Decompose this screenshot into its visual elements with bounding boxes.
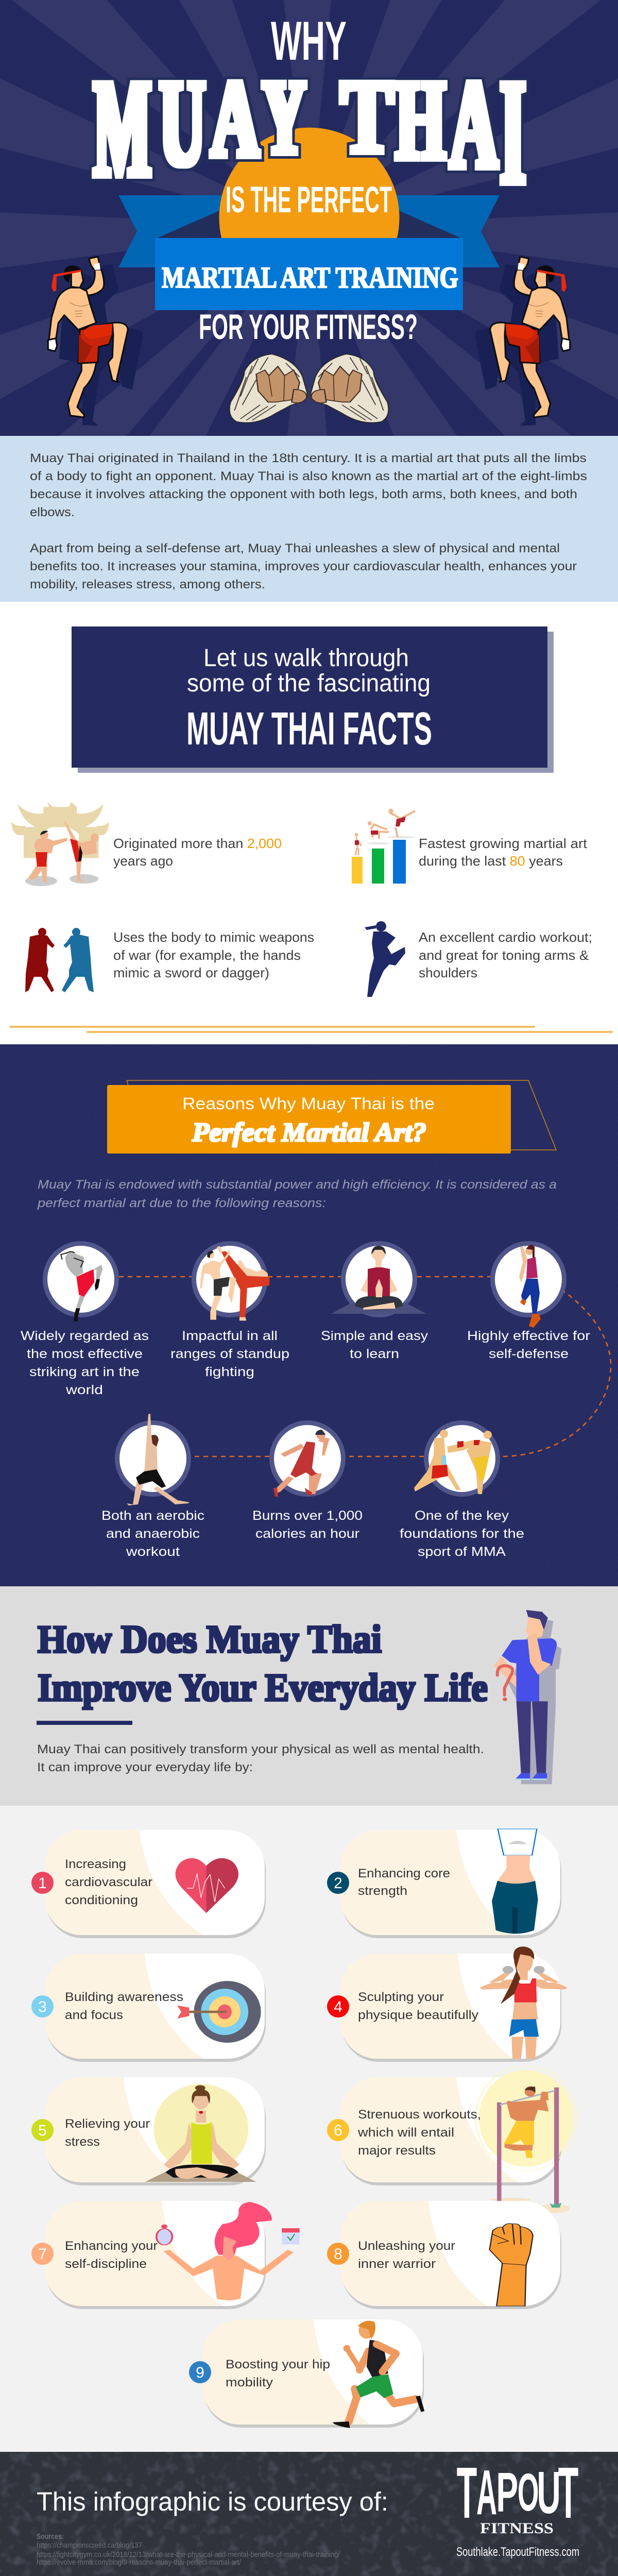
courtesy line: This infographic is courtesy of: [37, 2487, 388, 2516]
fact 2 text: Fastest growing martial art [419, 836, 588, 851]
reason 2 [170, 1241, 289, 1379]
reason 1 [21, 1241, 149, 1397]
card 2 text: strength [358, 1884, 407, 1898]
website: Southlake.TapoutFitness.com [456, 2545, 579, 2559]
card 6 text: major results [358, 2144, 436, 2158]
fact 1 text: Originated more than 2,000 [113, 836, 282, 851]
panel: facts [0, 602, 618, 1044]
badge 8: 8 [334, 2246, 342, 2263]
sources [37, 2532, 340, 2567]
sources: Sources: [37, 2532, 64, 2541]
intro paragraph 2: Apart from being a self-defense art, Muay Thai unleashes a slew of physical and mental [30, 541, 560, 555]
reason 2 text [170, 1329, 289, 1379]
card 5 text: stress [65, 2135, 100, 2149]
badge 4 [327, 1995, 349, 2018]
icon: growth bars with fighters [352, 809, 415, 884]
heading: how does muay thai improve your everyday life: Improve Your Everyday Life [38, 1666, 488, 1709]
icon: circle with stretching man [115, 1414, 191, 1505]
sunburst rays [0, 0, 618, 436]
panel: header [0, 0, 618, 436]
facts heading box [72, 626, 554, 773]
card 6 [327, 2077, 561, 2185]
fact 4 text: An excellent cardio workout; [419, 929, 592, 945]
card 8 [327, 2201, 561, 2309]
facts heading box: MUAY THAI FACTS [186, 703, 432, 755]
facts heading box: some of the fascinating [187, 670, 431, 697]
fact 4: and great for toning arms & [419, 947, 589, 963]
reason 2 text: Impactful in all [182, 1329, 278, 1343]
title: muay thai: U [160, 55, 205, 192]
icon: circle with meditating man [331, 1241, 426, 1317]
reason 5 text: workout [126, 1545, 180, 1559]
icon: circle with kicking fighter [43, 1241, 119, 1321]
fact 2 [352, 809, 588, 884]
card 5 text [65, 2117, 150, 2149]
card 9 text: Boosting your hip [226, 2358, 330, 2371]
badge 7 [31, 2243, 54, 2265]
card 4 text: physique beautifully [358, 2008, 478, 2022]
ribbon front [155, 238, 463, 310]
card 1 [31, 1830, 266, 1938]
badge 8 [327, 2243, 349, 2265]
icon: toned core [492, 1829, 538, 1934]
title: muay thai: H [396, 57, 445, 184]
card 1 text: cardiovascular [65, 1875, 152, 1889]
logo: tapout fitness: T [558, 2453, 578, 2534]
intro paragraph 2: mobility, releases stress, among others. [30, 578, 265, 591]
intro paragraph 1: because it involves attacking the opponent with both legs, both arms, both knees, and both [30, 487, 577, 501]
icon: red and blue fighters [25, 928, 94, 992]
reason 4 text [467, 1329, 590, 1361]
card 1 text: conditioning [65, 1893, 138, 1907]
card 7 [31, 2201, 300, 2309]
panel: everyday life benefits [0, 1806, 618, 2452]
card 4 text: Sculpting your [358, 1990, 444, 2004]
heading: how does muay thai improve your everyday life [38, 1618, 488, 1709]
icon: target with arrow [177, 1981, 261, 2043]
reason 1 text [21, 1329, 149, 1397]
panel: footer [0, 2452, 618, 2576]
dashed connector [119, 1277, 611, 1456]
reasons heading banner [107, 1080, 556, 1154]
reason 6 [252, 1420, 363, 1541]
icon: heart with pulse [176, 1858, 238, 1913]
card 4 text [358, 1990, 478, 2022]
card 3 [31, 1954, 266, 2062]
card 9 text: mobility [226, 2376, 273, 2389]
title: for your fitness: FOR YOUR FITNESS? [199, 307, 418, 347]
intro paragraph 1: Muay Thai originated in Thailand in the 18th century. It is a martial art that puts all the limbs [30, 451, 587, 465]
logo: tapout fitness: FITNESS [480, 2520, 554, 2537]
icon: circle with runner [269, 1420, 346, 1497]
title: muay thai: Y [263, 58, 306, 177]
card 2 text [358, 1867, 450, 1898]
icon: raised fist [490, 2224, 533, 2306]
card 3 text: and focus [65, 2008, 123, 2022]
reason 5 text [101, 1509, 204, 1559]
logo: tapout fitness [457, 2453, 578, 2537]
icon: temple with fighters [11, 802, 109, 886]
title: muay thai: I [501, 48, 526, 216]
card 8 text: Unleashing your [358, 2239, 455, 2253]
card 3 text: Building awareness [65, 1990, 183, 2004]
badge 6 [327, 2119, 349, 2141]
card 6 text: which will entail [357, 2126, 454, 2140]
reason 3 text: Simple and easy [321, 1329, 428, 1343]
card 7 text: Enhancing your [65, 2239, 158, 2253]
icon: left fighter [48, 257, 143, 426]
facts heading box: Let us walk through [203, 645, 409, 672]
fact 3 text: Uses the body to mimic weapons [113, 929, 314, 945]
badge 7: 7 [38, 2246, 47, 2263]
reason 5 text: Both an aerobic [101, 1509, 204, 1523]
fact 3: of war (for example, the hands [113, 947, 301, 963]
heading: how does muay thai improve your everyday life: How Does Muay Thai [38, 1618, 382, 1661]
reason 6 text [252, 1509, 363, 1541]
card 4 [327, 1946, 568, 2062]
reason 1 text: striking art in the [29, 1365, 140, 1379]
logo: tapout fitness: P [496, 2461, 518, 2523]
ribbon back [118, 195, 500, 267]
reason 3 text: to learn [350, 1347, 399, 1361]
reason 5 text: and anaerobic [106, 1527, 200, 1541]
title: why: WHY [271, 10, 347, 72]
title: muay thai [94, 48, 526, 216]
icon: woman with dumbbells [479, 1946, 568, 2059]
card 8 text: inner warrior [358, 2257, 436, 2271]
card 9 text [226, 2358, 330, 2389]
logo: tapout fitness: A [476, 2457, 497, 2528]
fact 3 [25, 928, 314, 992]
reasons intro text [37, 1178, 557, 1210]
badge 2: 2 [334, 1875, 342, 1892]
icon: thinking man [494, 1610, 562, 1784]
card 2 [327, 1829, 561, 1938]
sources: https://fightcitygym.co.uk/2018/12/13/what-are-the-physical-and-mental-benefits-of-muay-thai-training/ [37, 2550, 340, 2559]
card 7 text [65, 2239, 158, 2271]
intro paragraph 1: elbows. [30, 505, 75, 519]
badge 1: 1 [38, 1875, 47, 1892]
badge 6: 6 [334, 2122, 342, 2139]
logo: tapout fitness: O [518, 2463, 539, 2522]
card 5 [31, 2077, 266, 2185]
sources: https://evolve-mma.com/blog/9-reasons-muay-thai-perfect-martial-art/ [37, 2558, 242, 2567]
logo: tapout fitness: U [537, 2459, 561, 2526]
fact 3: mimic a sword or dagger) [113, 965, 269, 980]
card 3 text [65, 1990, 183, 2022]
card 7 text: self-discipline [65, 2257, 147, 2271]
badge 9 [189, 2361, 211, 2383]
icon: kicking fighter silhouette [365, 921, 405, 997]
intro text [37, 1742, 484, 1774]
intro paragraph 1 [30, 451, 587, 519]
panel: reasons [0, 1044, 618, 1586]
icon: circle with two MMA fighters [414, 1420, 500, 1497]
reason 1 text: the most effective [27, 1347, 143, 1361]
reason 5 [101, 1414, 204, 1559]
card 6 text [357, 2108, 481, 2158]
icon: circle with woman [490, 1241, 566, 1328]
reason 3 text [321, 1329, 428, 1361]
title: muay thai: A [450, 53, 497, 195]
reason 1 text: Widely regarded as [21, 1329, 149, 1343]
card 2 text: Enhancing core [358, 1867, 450, 1880]
fact 4 [365, 921, 592, 997]
fact 2: during the last 80 years [419, 853, 563, 869]
icon: runner [333, 2321, 424, 2428]
reason 7 text: One of the key [415, 1509, 509, 1523]
badge 3 [31, 1995, 54, 2018]
card 9 [189, 2319, 424, 2428]
icon: woman balancing clock and calendar [157, 2202, 300, 2300]
reasons heading banner: Reasons Why Muay Thai is the [182, 1094, 435, 1113]
fact 1 [11, 802, 282, 886]
reason 7 text: foundations for the [400, 1527, 524, 1541]
reason 7 [400, 1420, 524, 1559]
icon: meditating woman [145, 2084, 256, 2182]
badge 4: 4 [334, 1998, 342, 2015]
card 8 text [358, 2239, 455, 2271]
panel: introduction [0, 436, 618, 602]
icon: right glove [311, 354, 388, 422]
sources: https://championscreed.ca/blog/137 [37, 2541, 142, 2550]
intro paragraph 2: benefits too. It increases your stamina, improves your cardiovascular health, enhances your [30, 560, 577, 573]
reason 2 text: fighting [205, 1365, 254, 1379]
reason 3 [321, 1241, 428, 1361]
fact 4: shoulders [419, 965, 477, 980]
icon: right fighter [475, 257, 570, 426]
badge 1 [31, 1872, 54, 1894]
reason 6 text: calories an hour [255, 1527, 359, 1541]
card 1 text [65, 1857, 152, 1907]
reason 4 text: self-defense [489, 1347, 569, 1361]
card 6 text: Strenuous workouts, [358, 2108, 481, 2122]
reason 1 text: world [65, 1383, 103, 1397]
intro text: It can improve your everyday life by: [37, 1760, 253, 1774]
title: martial art training: MARTIAL ART TRAINING [162, 261, 458, 294]
fact 1: years ago [113, 853, 173, 869]
orange sun [219, 128, 400, 238]
logo: tapout fitness: T [457, 2453, 477, 2534]
title: is the perfect: IS THE PERFECT [226, 180, 392, 221]
badge 2 [327, 1872, 349, 1894]
badge 3: 3 [38, 1998, 47, 2015]
card 5 text: Relieving your [65, 2117, 150, 2131]
title: muay thai: M [94, 50, 151, 207]
badge 5: 5 [38, 2122, 47, 2139]
title: muay thai: T [340, 58, 393, 175]
panel: everyday life intro [0, 1586, 618, 1806]
icon: man doing pull-ups [476, 2066, 577, 2213]
reason 7 text: sport of MMA [418, 1545, 506, 1559]
badge 9: 9 [196, 2364, 204, 2381]
badge 5 [31, 2119, 54, 2141]
reason 4 [467, 1241, 590, 1361]
intro text: Muay Thai can positively transform your physical as well as mental health. [37, 1742, 484, 1756]
reasons heading banner: Perfect Martial Art? [192, 1118, 426, 1147]
reasons intro text: Muay Thai is endowed with substantial power and high efficiency. It is considered as a [38, 1178, 557, 1192]
reason 6 text: Burns over 1,000 [252, 1509, 363, 1523]
reasons intro text: perfect martial art due to the following reasons: [37, 1196, 326, 1210]
icon: left glove [230, 354, 307, 422]
intro paragraph 1: of a body to fight an opponent. Muay Thai is also known as the martial art of the eight-limbs [30, 469, 587, 483]
intro paragraph 2 [30, 541, 577, 591]
ribbon fold shadows [157, 211, 461, 238]
icon: circle with two fighters [192, 1241, 269, 1320]
title: muay thai: A [211, 57, 259, 180]
reason 7 text [400, 1509, 524, 1559]
reason 2 text: ranges of standup [170, 1347, 289, 1361]
card 1 text: Increasing [65, 1857, 126, 1871]
reason 4 text: Highly effective for [467, 1329, 590, 1343]
